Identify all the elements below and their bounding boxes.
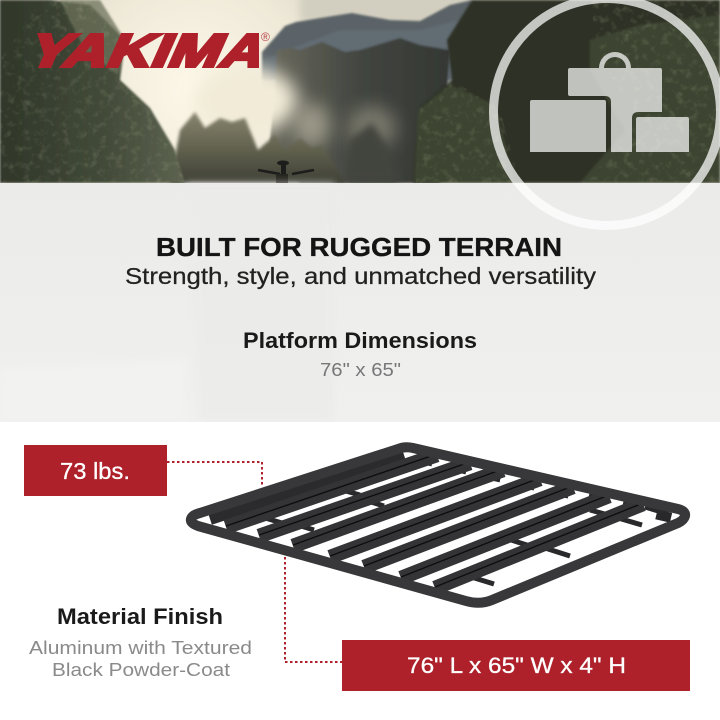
weight callout connector [167, 462, 262, 487]
panel: light translucent text background [0, 183, 720, 422]
cross bars [255, 488, 668, 584]
callout: overall dimensions [342, 640, 690, 691]
subtitle: Strength, style, and unmatched versatility [125, 263, 597, 289]
material finish description [29, 638, 252, 680]
icon: cargo capacity in ring [494, 0, 720, 226]
callout: weight [24, 445, 167, 496]
platform dimensions value: 76" x 65" [320, 360, 401, 380]
logo: Yakima: ® [261, 30, 270, 44]
platform dimensions heading: Platform Dimensions [243, 328, 477, 353]
slats [226, 455, 643, 588]
icon: cargo boxes [530, 52, 689, 152]
icon ring [494, 0, 720, 226]
dimensions callout connector [285, 552, 342, 662]
callout: weight: 73 lbs. [60, 458, 130, 484]
left side rail [210, 455, 404, 519]
logo: Yakima [37, 32, 270, 68]
logo: Yakima: YAKIMA [19, 23, 280, 78]
material finish heading: Material Finish [57, 604, 223, 629]
material finish description: Black Powder-Coat [52, 660, 230, 680]
back cross rail [418, 458, 672, 518]
callout: overall dimensions: 76" L x 65" W x 4" H [407, 653, 626, 678]
material finish description: Aluminum with Textured [29, 638, 252, 658]
material finish text block [29, 604, 252, 680]
bicycle handlebars [258, 160, 314, 183]
background photo: misty forest [0, 0, 720, 183]
roof rack platform [191, 447, 685, 603]
bottom section background [0, 422, 720, 720]
title: BUILT FOR RUGGED TERRAIN [156, 232, 562, 262]
outer frame [191, 447, 685, 603]
slat grooves [226, 454, 643, 587]
